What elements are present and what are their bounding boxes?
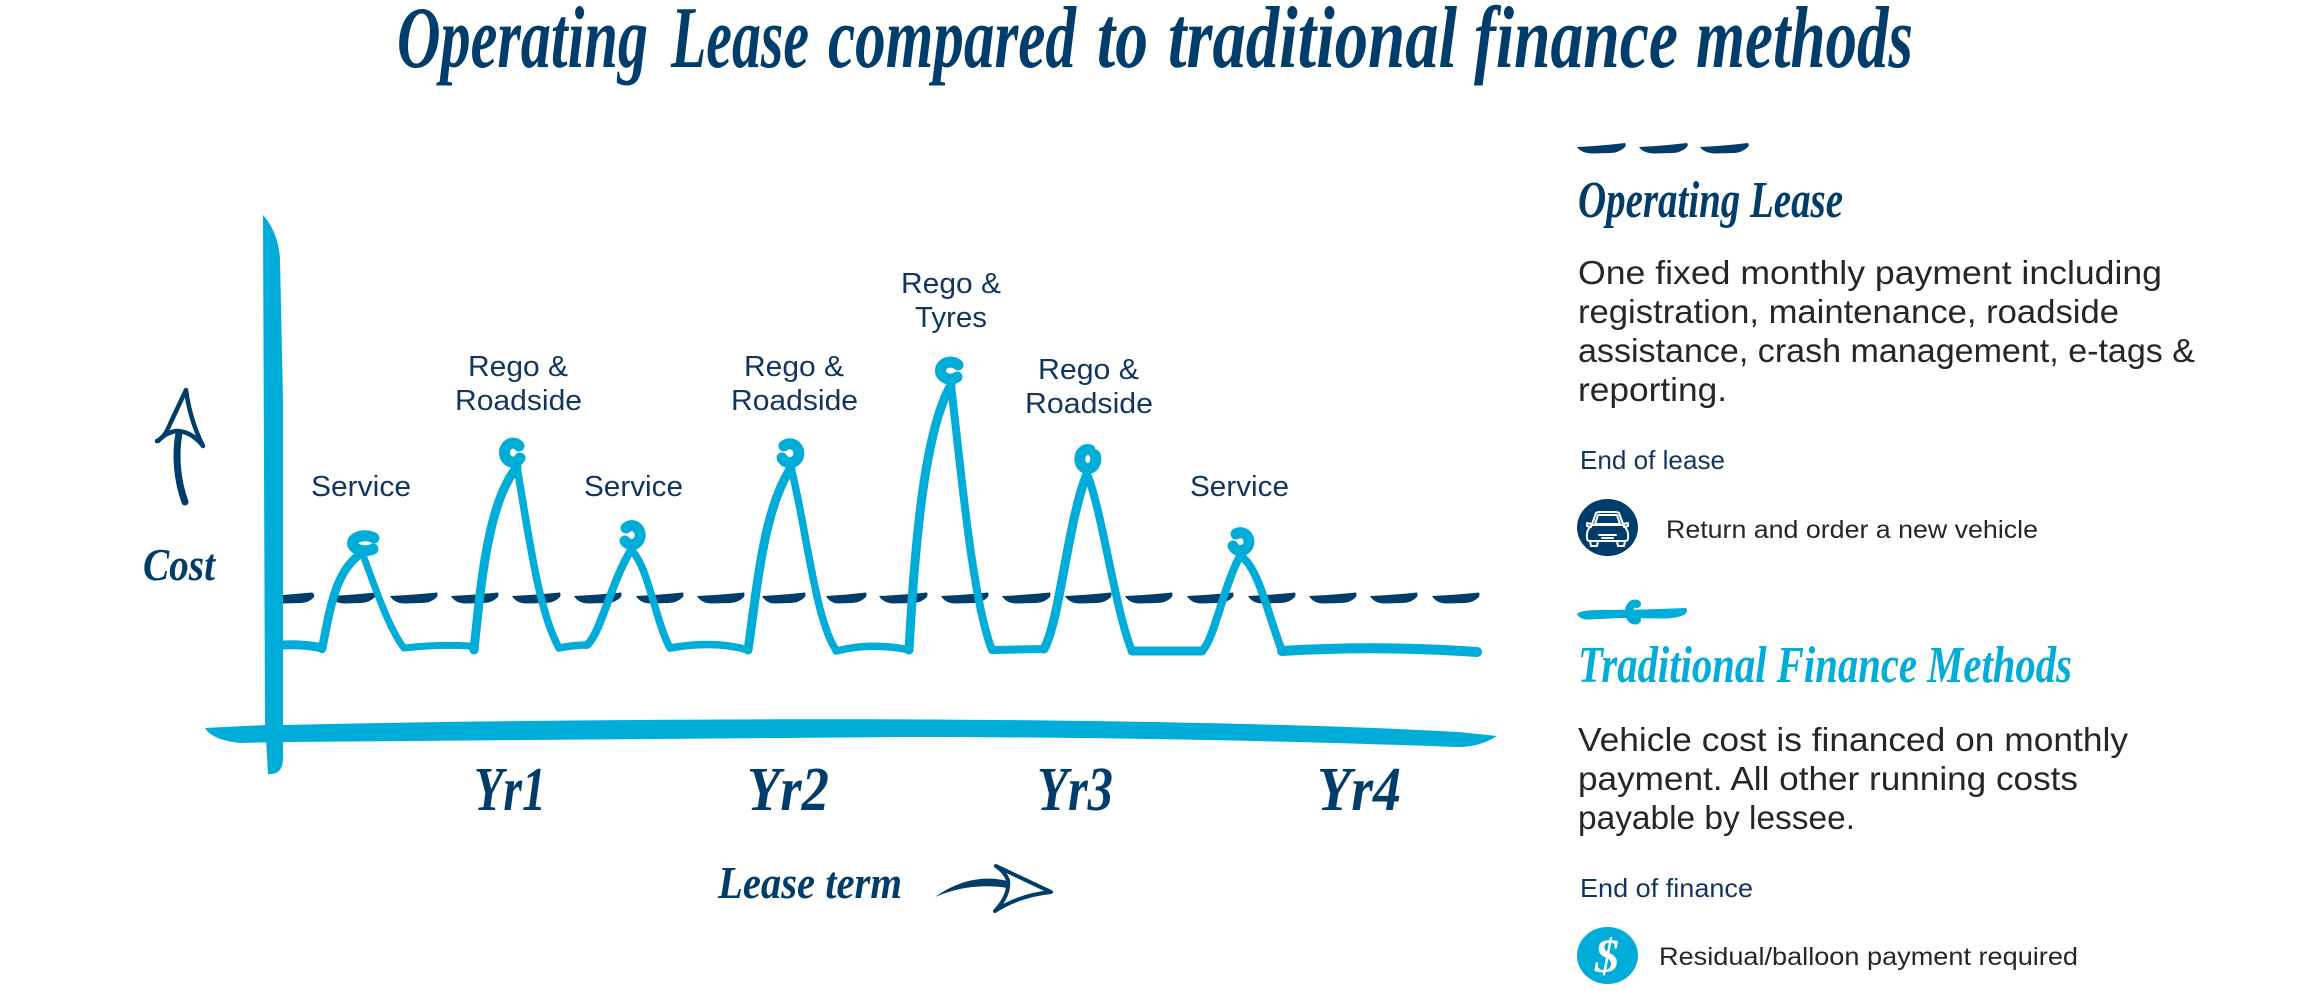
text: operating lease description: reporting. <box>1578 371 1727 408</box>
y axis <box>263 215 283 774</box>
axis label: Yr4: Yr4 <box>1317 756 1401 824</box>
text: operating lease description <box>1578 254 2195 408</box>
label: rego and roadside 1: Roadside <box>455 385 582 417</box>
panel: operating lease legend <box>1577 143 2195 556</box>
axis label: Yr1: Yr1 <box>474 756 546 824</box>
text: return and order: Return and order a new vehicle <box>1666 516 2038 544</box>
icon: car <box>1577 499 1638 556</box>
legend key: peak line <box>1577 604 1687 620</box>
panel: traditional finance legend <box>1577 604 2129 984</box>
text: traditional finance description: payable by lessee. <box>1578 799 1855 836</box>
label: rego and roadside 2 <box>731 351 858 417</box>
text: residual payment: Residual/balloon payment required <box>1659 943 2078 971</box>
title <box>397 0 1913 87</box>
label: service 2: Service <box>584 471 683 503</box>
text: traditional finance description <box>1578 721 2129 836</box>
text: operating lease description: assistance, crash management, e-tags & <box>1578 332 2195 369</box>
legend key: dashed line <box>1577 143 1749 154</box>
label: rego and roadside 3 <box>1025 354 1153 420</box>
icon: dollar: $ <box>1594 930 1619 983</box>
dashed line: operating lease flat cost <box>283 592 1480 604</box>
label: rego and roadside 3: Roadside <box>1025 388 1153 420</box>
axis label: Yr3: Yr3 <box>1037 756 1113 824</box>
label: rego and roadside 1 <box>455 351 582 417</box>
line: traditional finance cost peaks <box>283 362 1477 652</box>
text: operating lease description: One fixed monthly payment including <box>1578 254 2162 291</box>
icon: dollar <box>1577 927 1638 984</box>
axis label: Yr2: Yr2 <box>747 756 829 824</box>
label: rego and tyres: Rego & <box>901 268 1001 300</box>
label: rego and tyres <box>901 268 1001 334</box>
label: rego and tyres: Tyres <box>915 302 987 334</box>
subheading: end of finance: End of finance <box>1580 873 1753 903</box>
subheading: end of lease: End of lease <box>1580 445 1725 475</box>
label: rego and roadside 1: Rego & <box>468 351 568 383</box>
text: operating lease description: registration, maintenance, roadside <box>1578 293 2119 330</box>
arrow: cost axis up <box>157 390 203 502</box>
label: rego and roadside 2: Roadside <box>731 385 858 417</box>
label: service 1: Service <box>311 471 411 503</box>
label: rego and roadside 2: Rego & <box>744 351 844 383</box>
heading: traditional finance methods: Traditional Finance Methods <box>1578 637 2072 694</box>
x axis <box>205 719 1497 747</box>
text: traditional finance description: Vehicle cost is financed on monthly <box>1578 721 2129 758</box>
text: traditional finance description: payment. All other running costs <box>1578 760 2078 797</box>
heading: operating lease: Operating Lease <box>1578 172 1843 229</box>
arrow: lease term right <box>935 866 1051 911</box>
axis label: cost: Cost <box>143 539 216 590</box>
label: rego and roadside 3: Rego & <box>1038 354 1139 386</box>
axis label: lease term: Lease term <box>717 857 902 908</box>
label: service 3: Service <box>1190 471 1289 503</box>
